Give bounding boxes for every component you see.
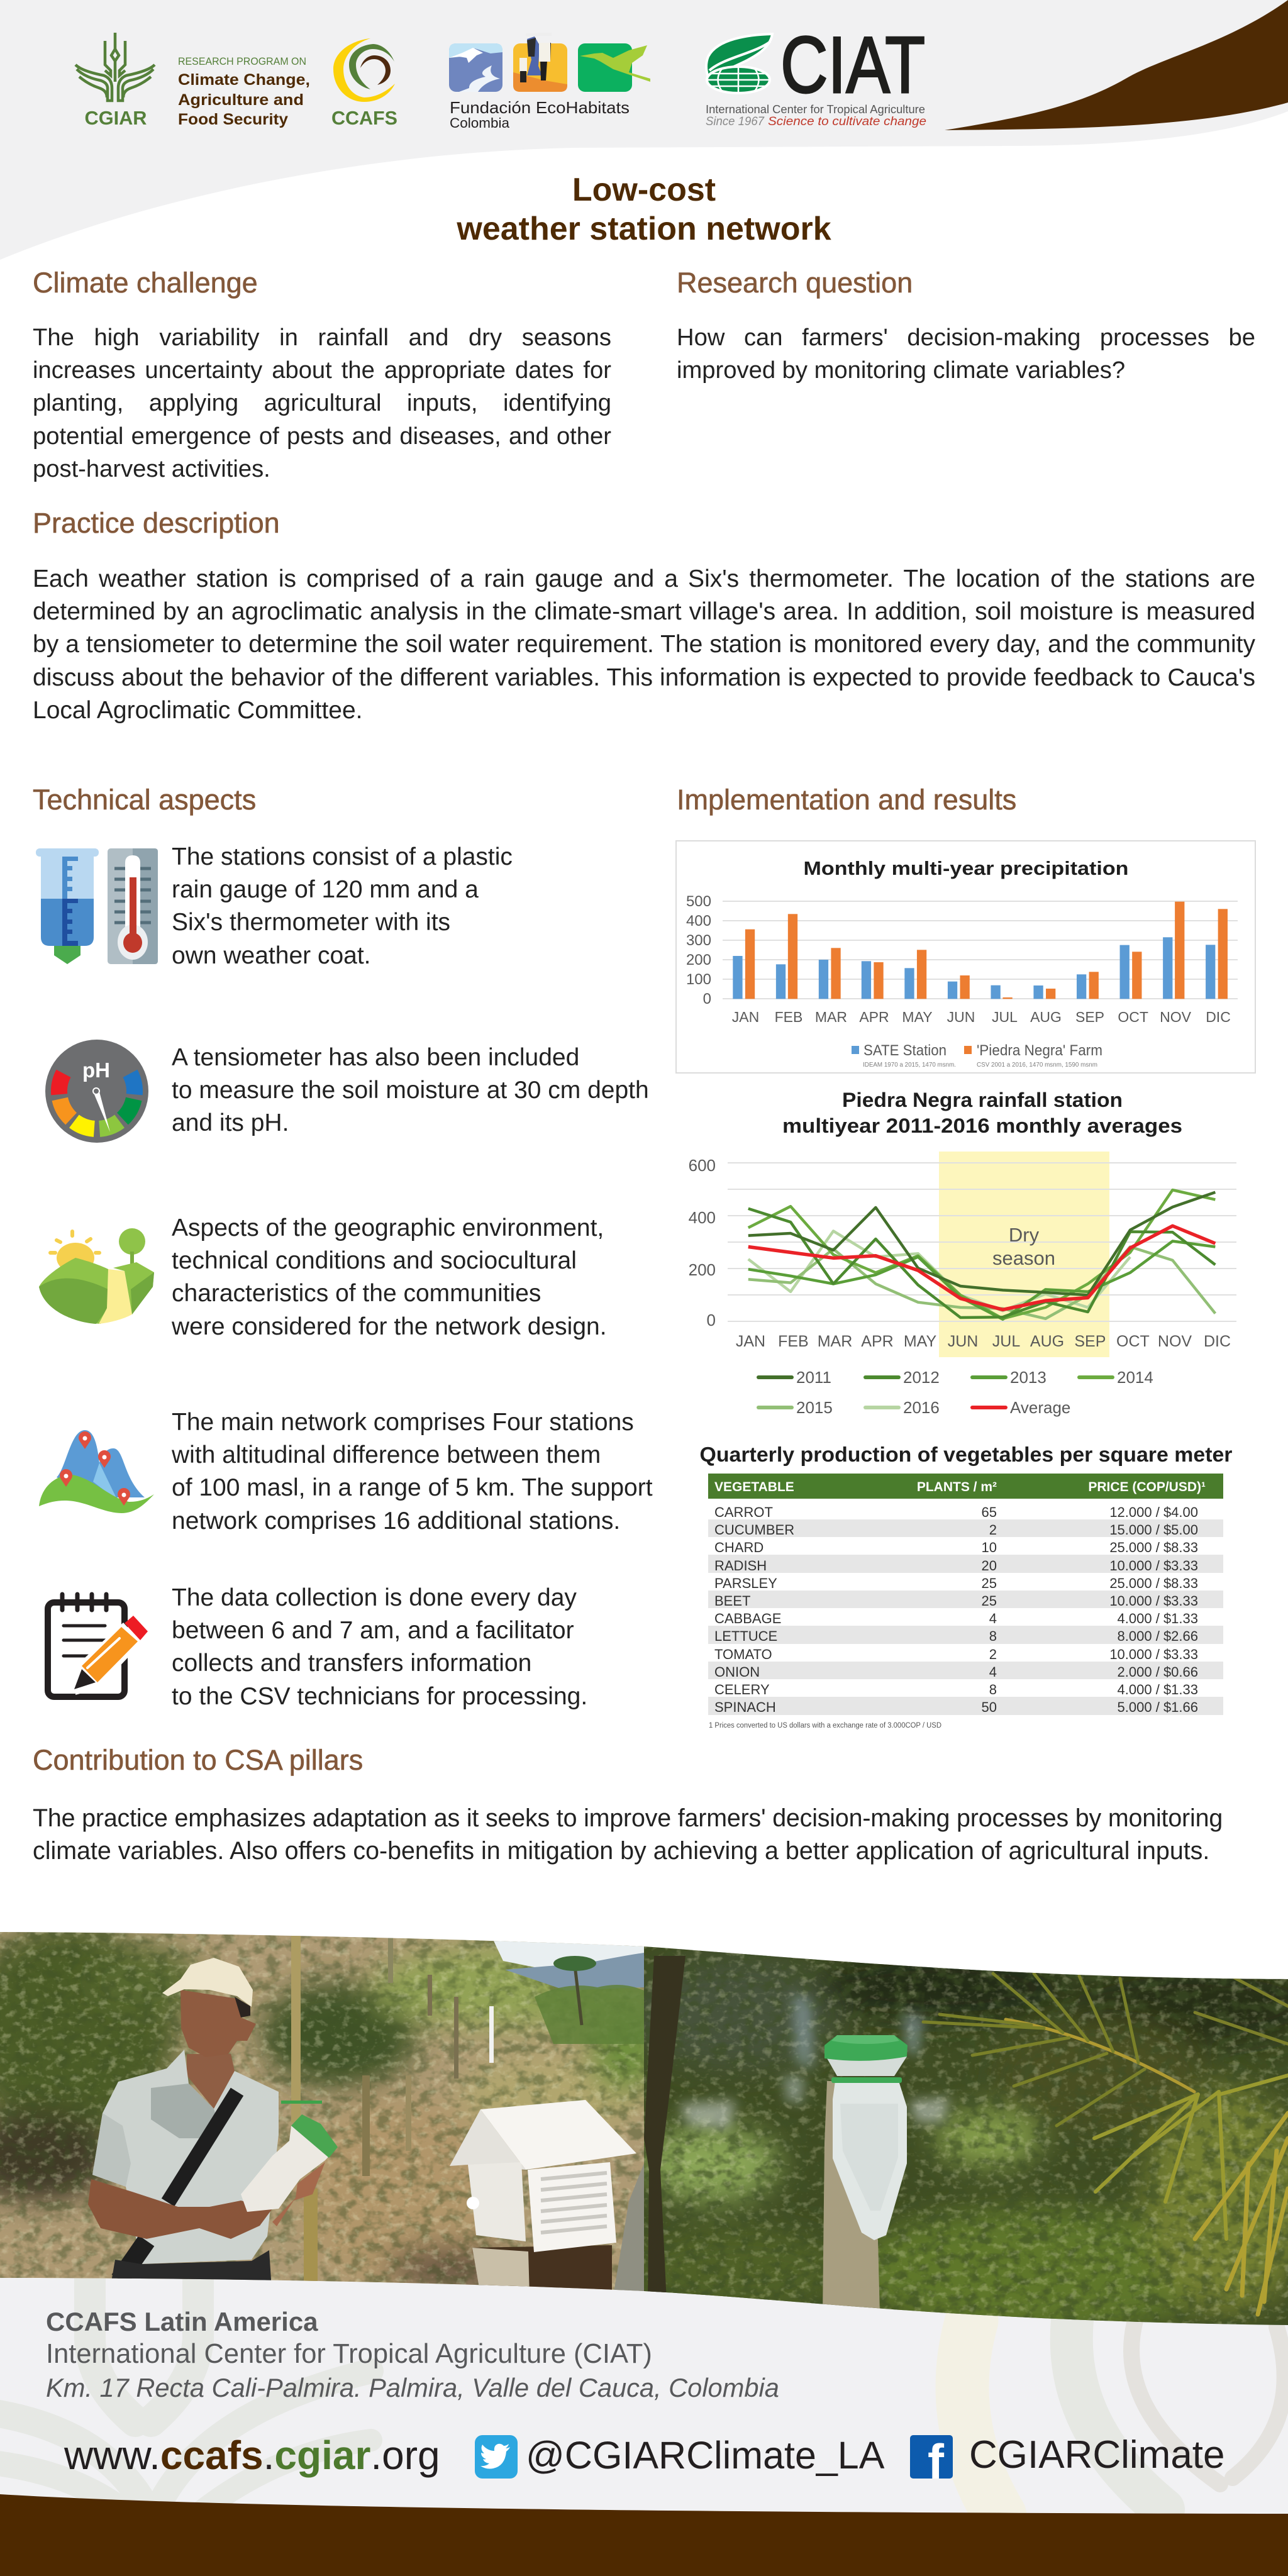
chart: Piedra Negra rainfall line chart: APR [861, 1333, 894, 1350]
chart: monthly multi-year precipitation: MAR [815, 1009, 847, 1025]
icon: rain gauge [36, 848, 99, 964]
heading: climate challenge: Climate challenge [33, 267, 258, 299]
heading: practice description: Practice description [33, 507, 280, 539]
heading: implementation and results: Implementation and results [677, 784, 1016, 816]
chart: Piedra Negra rainfall line chart: 2013 [1010, 1368, 1046, 1387]
text: tensiometer: to measure the soil moisture at 30 cm depth [172, 1077, 649, 1104]
farmer [88, 1958, 338, 2289]
table: quarterly production of vegetables: 4.000 / $1.33 [1118, 1682, 1198, 1697]
chart: monthly multi-year precipitation: JUN [947, 1009, 975, 1025]
chart: Piedra Negra rainfall line chart: 2016 [903, 1398, 940, 1417]
chart: monthly multi-year precipitation: 300 [686, 932, 711, 949]
table: quarterly production of vegetables: BEET [714, 1593, 750, 1609]
table: quarterly production of vegetables: 8 [989, 1628, 997, 1644]
chart: Piedra Negra rainfall line chart: OCT [1116, 1333, 1150, 1350]
chart: Piedra Negra rainfall line chart: Dry [1009, 1224, 1040, 1246]
title: weather station network [457, 211, 831, 247]
table: quarterly production of vegetables: ONION [714, 1664, 760, 1680]
text: practice description: determined by an agroclimatic analysis in the climate-smart village's area. In addition, soil moisture is measured [33, 598, 1255, 625]
header grey curve [0, 0, 1288, 260]
icon: notepad and pencil [48, 1594, 148, 1697]
text: main network [172, 1406, 653, 1538]
organisation full name: International Center for Tropical Agriculture (CIAT) [46, 2339, 652, 2369]
icon: twitter [475, 2435, 518, 2479]
chart: Piedra Negra rainfall line chart: NOV [1158, 1333, 1192, 1350]
icon: thermometer [108, 848, 158, 964]
icon: landscape with sun and tree [39, 1228, 154, 1324]
icon: pH gauge [45, 1040, 148, 1143]
chart: Piedra Negra rainfall line chart: multiyear 2011-2016 monthly averages [782, 1114, 1182, 1137]
logo text: research program: RESEARCH PROGRAM ON [178, 56, 306, 67]
chart: Piedra Negra rainfall line chart: 600 [689, 1156, 716, 1175]
table: quarterly production of vegetables: RADISH [714, 1558, 767, 1574]
chart: monthly multi-year precipitation: Monthly multi-year precipitation [804, 857, 1128, 879]
logo: Fundación EcoHabitats: Fundación EcoHabitats [450, 98, 630, 117]
logo: CIAT [706, 20, 926, 128]
text: network design: characteristics of the communities [172, 1280, 541, 1307]
text: climate challenge: increases uncertainty about the appropriate dates for [33, 357, 611, 384]
table: quarterly production of vegetables: 65 [982, 1504, 997, 1520]
text: climate challenge: planting, applying agricultural inputs, identifying [33, 389, 611, 416]
text: network design: were considered for the network design. [172, 1313, 607, 1340]
table: quarterly production of vegetables: 25.000 / $8.33 [1109, 1575, 1198, 1591]
icon: pH gauge: pH [82, 1058, 110, 1082]
weather shelter [450, 2100, 636, 2296]
table: quarterly production of vegetables: TOMATO [714, 1646, 772, 1662]
text: climate challenge: post-harvest activities. [33, 455, 270, 482]
table: quarterly production of vegetables: CARROT [714, 1504, 773, 1520]
logo: CIAT: International Center for Tropical Agriculture [706, 103, 925, 116]
text: data collection [172, 1582, 587, 1713]
chart: monthly multi-year precipitation: FEB [775, 1009, 802, 1025]
table: quarterly production of vegetables: 2 [989, 1646, 997, 1662]
logo: CIAT: CIAT [780, 20, 925, 109]
chart: monthly multi-year precipitation: DIC [1206, 1009, 1231, 1025]
text: climate challenge: potential emergence of pests and diseases, and other [33, 423, 611, 450]
text: practice description: Each weather station is comprised of a rain gauge and a Six's thermometer. The location of the stations are [33, 565, 1255, 592]
chart: Piedra Negra rainfall line chart: 200 [689, 1260, 716, 1279]
header logos [74, 20, 926, 131]
photo: plastic rain gauge on a post [629, 1943, 1288, 2333]
photo: farmer with rain gauge and weather shelter [0, 1924, 663, 2302]
text: climate challenge: The high variability in rainfall and dry seasons [33, 324, 611, 351]
post [823, 2081, 880, 2314]
chart: Piedra Negra rainfall line chart: 2012 [903, 1368, 940, 1387]
text: tensiometer: and its pH. [172, 1109, 289, 1136]
chart: monthly multi-year precipitation: JUL [992, 1009, 1018, 1025]
chart: monthly multi-year precipitation: IDEAM 1970 a 2015, 1470 msnm. [863, 1061, 956, 1069]
text: rain gauge and thermometer [172, 843, 513, 969]
table: quarterly production of vegetables: 25 [982, 1593, 997, 1609]
logo text: research program: Climate Change, [178, 71, 310, 89]
logo text: research program: Agriculture and [178, 91, 304, 109]
text: data collection: collects and transfers information [172, 1650, 531, 1677]
text: contribution: climate variables. Also offers co-benefits in mitigation by achieving a better application of agricultural inputs. [33, 1837, 1209, 1865]
text: practice description [33, 565, 1255, 724]
heading: contribution to CSA pillars: Contribution to CSA pillars [33, 1744, 363, 1776]
chart: Piedra Negra rainfall line chart: MAR [818, 1333, 852, 1350]
chart: monthly multi-year precipitation [676, 841, 1255, 1073]
text: research question: improved by monitoring climate variables? [677, 357, 1125, 384]
twitter handle: @CGIARClimate_LA [526, 2434, 884, 2477]
chart: monthly multi-year precipitation: 400 [686, 913, 711, 930]
table: quarterly production of vegetables: PRICE (COP/USD)¹ [1088, 1480, 1206, 1494]
chart: monthly multi-year precipitation: 500 [686, 893, 711, 910]
chart: monthly multi-year precipitation: APR [859, 1009, 889, 1025]
table: quarterly production of vegetables: 10.000 / $3.33 [1109, 1646, 1198, 1662]
chart: monthly multi-year precipitation: OCT [1118, 1009, 1148, 1025]
chart: Piedra Negra rainfall line chart: JUL [992, 1333, 1020, 1350]
chart: monthly multi-year precipitation: 200 [686, 952, 711, 969]
table: quarterly production of vegetables: PLANTS / m² [917, 1480, 997, 1494]
chart: Piedra Negra rainfall line chart: 0 [707, 1311, 716, 1330]
chart: Piedra Negra rainfall line chart: JUN [948, 1333, 978, 1350]
text: data collection: The data collection is done every day [172, 1584, 577, 1611]
tree trunks [644, 1956, 686, 2302]
footer brown band [0, 2494, 1288, 2576]
chart: Piedra Negra rainfall line chart: 2014 [1117, 1368, 1153, 1387]
text: rain gauge and thermometer: The stations consist of a plastic [172, 843, 513, 870]
table: quarterly production of vegetables: CUCUMBER [714, 1522, 794, 1538]
logo: Fundación EcoHabitats [449, 33, 650, 131]
text: rain gauge and thermometer: rain gauge of 120 mm and a [172, 876, 479, 903]
text: tensiometer [172, 1044, 649, 1136]
text: main network: network comprises 16 additional stations. [172, 1507, 620, 1535]
text: main network: with altitudinal difference between them [172, 1441, 601, 1468]
text: main network: The main network comprises Four stations [172, 1409, 634, 1436]
organisation name: CCAFS Latin America [46, 2307, 318, 2336]
table: quarterly production of vegetables: VEGETABLE [714, 1480, 794, 1494]
rain gauge [824, 2035, 908, 2240]
text: network design: Aspects of the geographic environment, [172, 1214, 604, 1241]
text: contribution: The practice emphasizes adaptation as it seeks to improve farmers' decision-making processes by monitoring [33, 1804, 1223, 1832]
header brown swoosh [945, 0, 1288, 130]
table: quarterly production of vegetables: CABBAGE [714, 1611, 781, 1626]
table: quarterly production of vegetables: 10 [982, 1540, 997, 1555]
table: quarterly production of vegetables: 1 Prices converted to US dollars with a exchange rate of 3.000COP / USD [709, 1722, 941, 1729]
text: data collection: to the CSV technicians for processing. [172, 1683, 587, 1710]
text: contribution [33, 1802, 1223, 1867]
website: www.ccafs.cgiar.org [64, 2433, 440, 2478]
table: quarterly production of vegetables: 25.000 / $8.33 [1109, 1540, 1198, 1555]
icon: facebook [910, 2435, 953, 2479]
sky and mountain [493, 1940, 644, 2044]
table: quarterly production of vegetables: SPINACH [714, 1699, 776, 1715]
chart: monthly multi-year precipitation: SATE Station [863, 1042, 947, 1059]
heading: research question: Research question [677, 267, 913, 299]
table: quarterly production of vegetables: 10.000 / $3.33 [1109, 1593, 1198, 1609]
chart: monthly multi-year precipitation: 'Piedra Negra' Farm [977, 1042, 1102, 1059]
chart: monthly multi-year precipitation: CSV 2001 a 2016, 1470 msnm, 1590 msnm [977, 1061, 1097, 1069]
table: quarterly production of vegetables: CELERY [714, 1682, 770, 1697]
table: quarterly production of vegetables: 15.000 / $5.00 [1109, 1522, 1198, 1538]
text: rain gauge and thermometer: own weather coat. [172, 942, 371, 969]
text: climate challenge [33, 324, 611, 482]
chart: Piedra Negra rainfall line chart: DIC [1204, 1333, 1231, 1350]
table: quarterly production of vegetables [699, 1443, 1233, 1729]
text: research question [677, 324, 1255, 384]
chart: Piedra Negra rainfall line chart: 2015 [796, 1398, 833, 1417]
text: network design: technical conditions and sociocultural [172, 1247, 577, 1274]
facebook page: CGIARClimate [969, 2433, 1225, 2477]
table: quarterly production of vegetables: 2 [989, 1522, 997, 1538]
table: quarterly production of vegetables: 10.000 / $3.33 [1109, 1558, 1198, 1574]
chart: monthly multi-year precipitation: AUG [1030, 1009, 1062, 1025]
chart: Piedra Negra rainfall line chart: Average [1010, 1398, 1070, 1417]
logo: CCAFS [331, 38, 397, 129]
sky patches [679, 1994, 950, 2129]
poles [281, 1934, 494, 2289]
chart: Piedra Negra rainfall line chart [689, 1089, 1236, 1417]
table: quarterly production of vegetables: 12.000 / $4.00 [1109, 1504, 1198, 1520]
logo: CIAT: Since 1967 [706, 115, 765, 128]
chart: monthly multi-year precipitation: 0 [703, 991, 711, 1008]
chart: Piedra Negra rainfall line chart: SEP [1074, 1333, 1106, 1350]
palm fronds [923, 1968, 1288, 2314]
title: Low-cost [572, 172, 716, 208]
chart: Piedra Negra rainfall line chart: 400 [689, 1208, 716, 1227]
table: quarterly production of vegetables: 2.000 / $0.66 [1118, 1664, 1198, 1680]
postal address: Km. 17 Recta Cali-Palmira. Palmira, Valle del Cauca, Colombia [46, 2373, 779, 2402]
table: quarterly production of vegetables: 4 [989, 1664, 997, 1680]
text: network design [172, 1214, 607, 1340]
table: quarterly production of vegetables: 25 [982, 1575, 997, 1591]
table: quarterly production of vegetables: 8.000 / $2.66 [1118, 1628, 1198, 1644]
logo: CIAT: Science to cultivate change [768, 115, 926, 128]
text: data collection: between 6 and 7 am, and a facilitator [172, 1617, 574, 1644]
logo: Fundación EcoHabitats: Colombia [450, 115, 510, 131]
chart: monthly multi-year precipitation: JAN [732, 1009, 759, 1025]
logo: CGIAR [75, 33, 155, 129]
chart: monthly multi-year precipitation: SEP [1075, 1009, 1104, 1025]
table: quarterly production of vegetables: 4 [989, 1611, 997, 1626]
title [457, 172, 831, 247]
text: rain gauge and thermometer: Six's thermometer with its [172, 909, 450, 936]
footer panel [0, 2278, 1288, 2514]
chart: Piedra Negra rainfall line chart: MAY [904, 1333, 936, 1350]
footer watermark [0, 2264, 1285, 2522]
chart: Piedra Negra rainfall line chart: Piedra Negra rainfall station [842, 1089, 1123, 1111]
footer address [46, 2305, 801, 2406]
chart: Piedra Negra rainfall line chart: 2011 [796, 1368, 831, 1387]
logo text: research program: Food Security [178, 111, 288, 128]
table: quarterly production of vegetables: CHARD [714, 1540, 763, 1555]
chart: Piedra Negra rainfall line chart: season [992, 1247, 1055, 1269]
chart: monthly multi-year precipitation: MAY [902, 1009, 933, 1025]
text: practice description: by a tensiometer to determine the soil water requirement. The station is monitored every day, and the community [33, 631, 1255, 658]
text: tensiometer: A tensiometer has also been included [172, 1044, 579, 1071]
table: quarterly production of vegetables: 8 [989, 1682, 997, 1697]
chart: monthly multi-year precipitation: 100 [686, 971, 711, 988]
table: quarterly production of vegetables: 50 [982, 1699, 997, 1715]
logo: CCAFS: CCAFS [331, 107, 397, 129]
heading: technical aspects: Technical aspects [33, 784, 256, 816]
text: practice description: discuss about the behavior of the different variables. This information is expected to provide feedback to Cauca's [33, 664, 1255, 691]
text: main network: of 100 masl, in a range of 5 km. The support [172, 1474, 653, 1501]
table: quarterly production of vegetables: Quarterly production of vegetables per square meter [699, 1443, 1233, 1466]
logo: CGIAR: CGIAR [84, 107, 147, 129]
table: quarterly production of vegetables: PARSLEY [714, 1575, 777, 1591]
chart: Piedra Negra rainfall line chart: AUG [1030, 1333, 1064, 1350]
table: quarterly production of vegetables: LETTUCE [714, 1628, 777, 1644]
table: quarterly production of vegetables: 4.000 / $1.33 [1118, 1611, 1198, 1626]
text: research question: How can farmers' decision-making processes be [677, 324, 1255, 351]
chart: Piedra Negra rainfall line chart: FEB [778, 1333, 809, 1350]
table: quarterly production of vegetables: 20 [982, 1558, 997, 1574]
chart: monthly multi-year precipitation: NOV [1160, 1009, 1192, 1025]
text: practice description: Local Agroclimatic Committee. [33, 697, 363, 724]
table: quarterly production of vegetables: 5.000 / $1.66 [1118, 1699, 1198, 1715]
chart: Piedra Negra rainfall line chart: JAN [736, 1333, 765, 1350]
logo text: research program [178, 56, 310, 128]
icon: mountains with location pins [39, 1430, 154, 1513]
